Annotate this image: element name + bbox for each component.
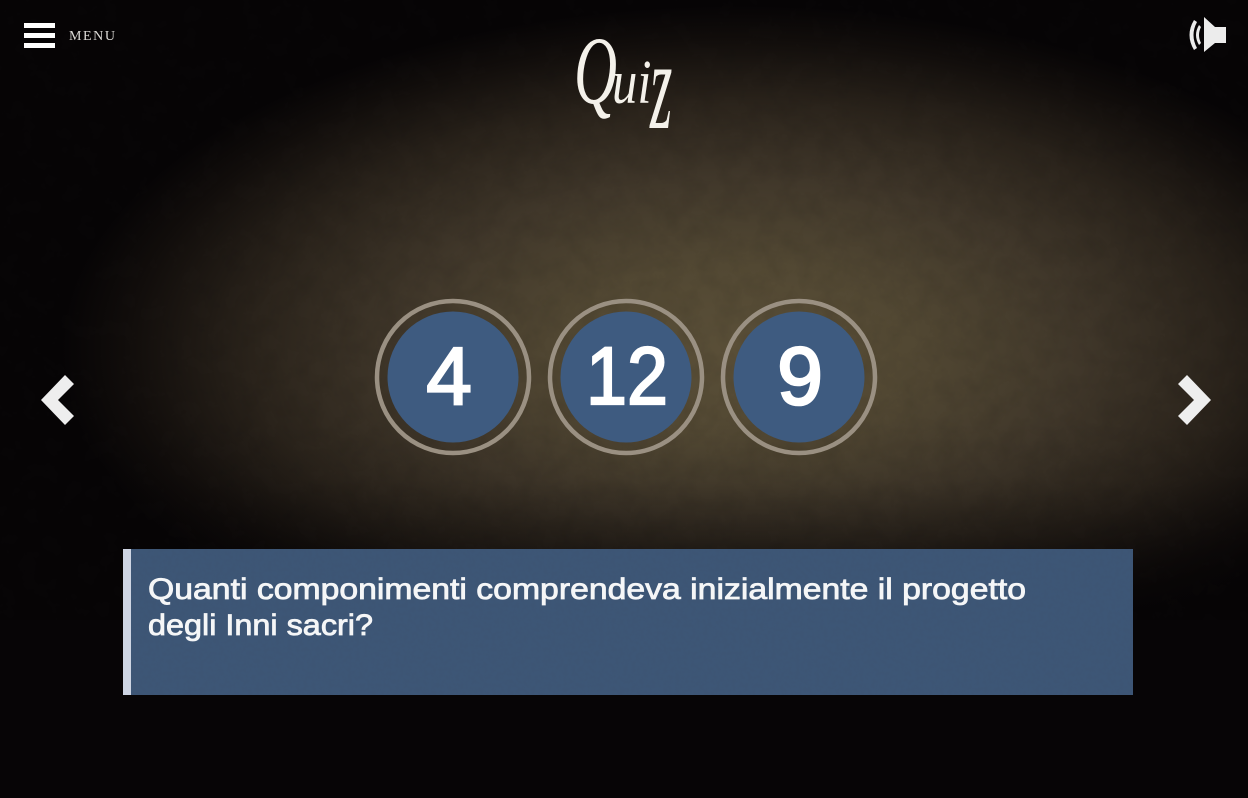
panel background xyxy=(123,549,1133,695)
icon: speaker xyxy=(1190,17,1226,52)
arrow: next xyxy=(1178,375,1211,425)
question text: Quanti componimenti comprendeva inizialmente il progetto xyxy=(148,573,1026,606)
icon: hamburger menu xyxy=(24,23,55,48)
title: ui xyxy=(612,48,652,117)
panel accent bar xyxy=(123,549,131,695)
title: z xyxy=(649,16,672,156)
answer option: 9: 9 xyxy=(777,331,823,422)
answer option: 4 xyxy=(377,301,529,453)
question text: degli Inni sacri? xyxy=(148,609,373,642)
title: Q xyxy=(574,19,617,125)
title xyxy=(574,16,672,156)
answer option: 4: 4 xyxy=(426,331,472,422)
answer option: 9 xyxy=(723,301,875,453)
menu label: MENU xyxy=(69,29,115,44)
menu button xyxy=(24,23,115,48)
arrow: previous xyxy=(41,375,74,425)
question panel xyxy=(123,549,1133,695)
answer option: 12 xyxy=(550,301,702,453)
answer option: 12: 12 xyxy=(586,331,668,422)
